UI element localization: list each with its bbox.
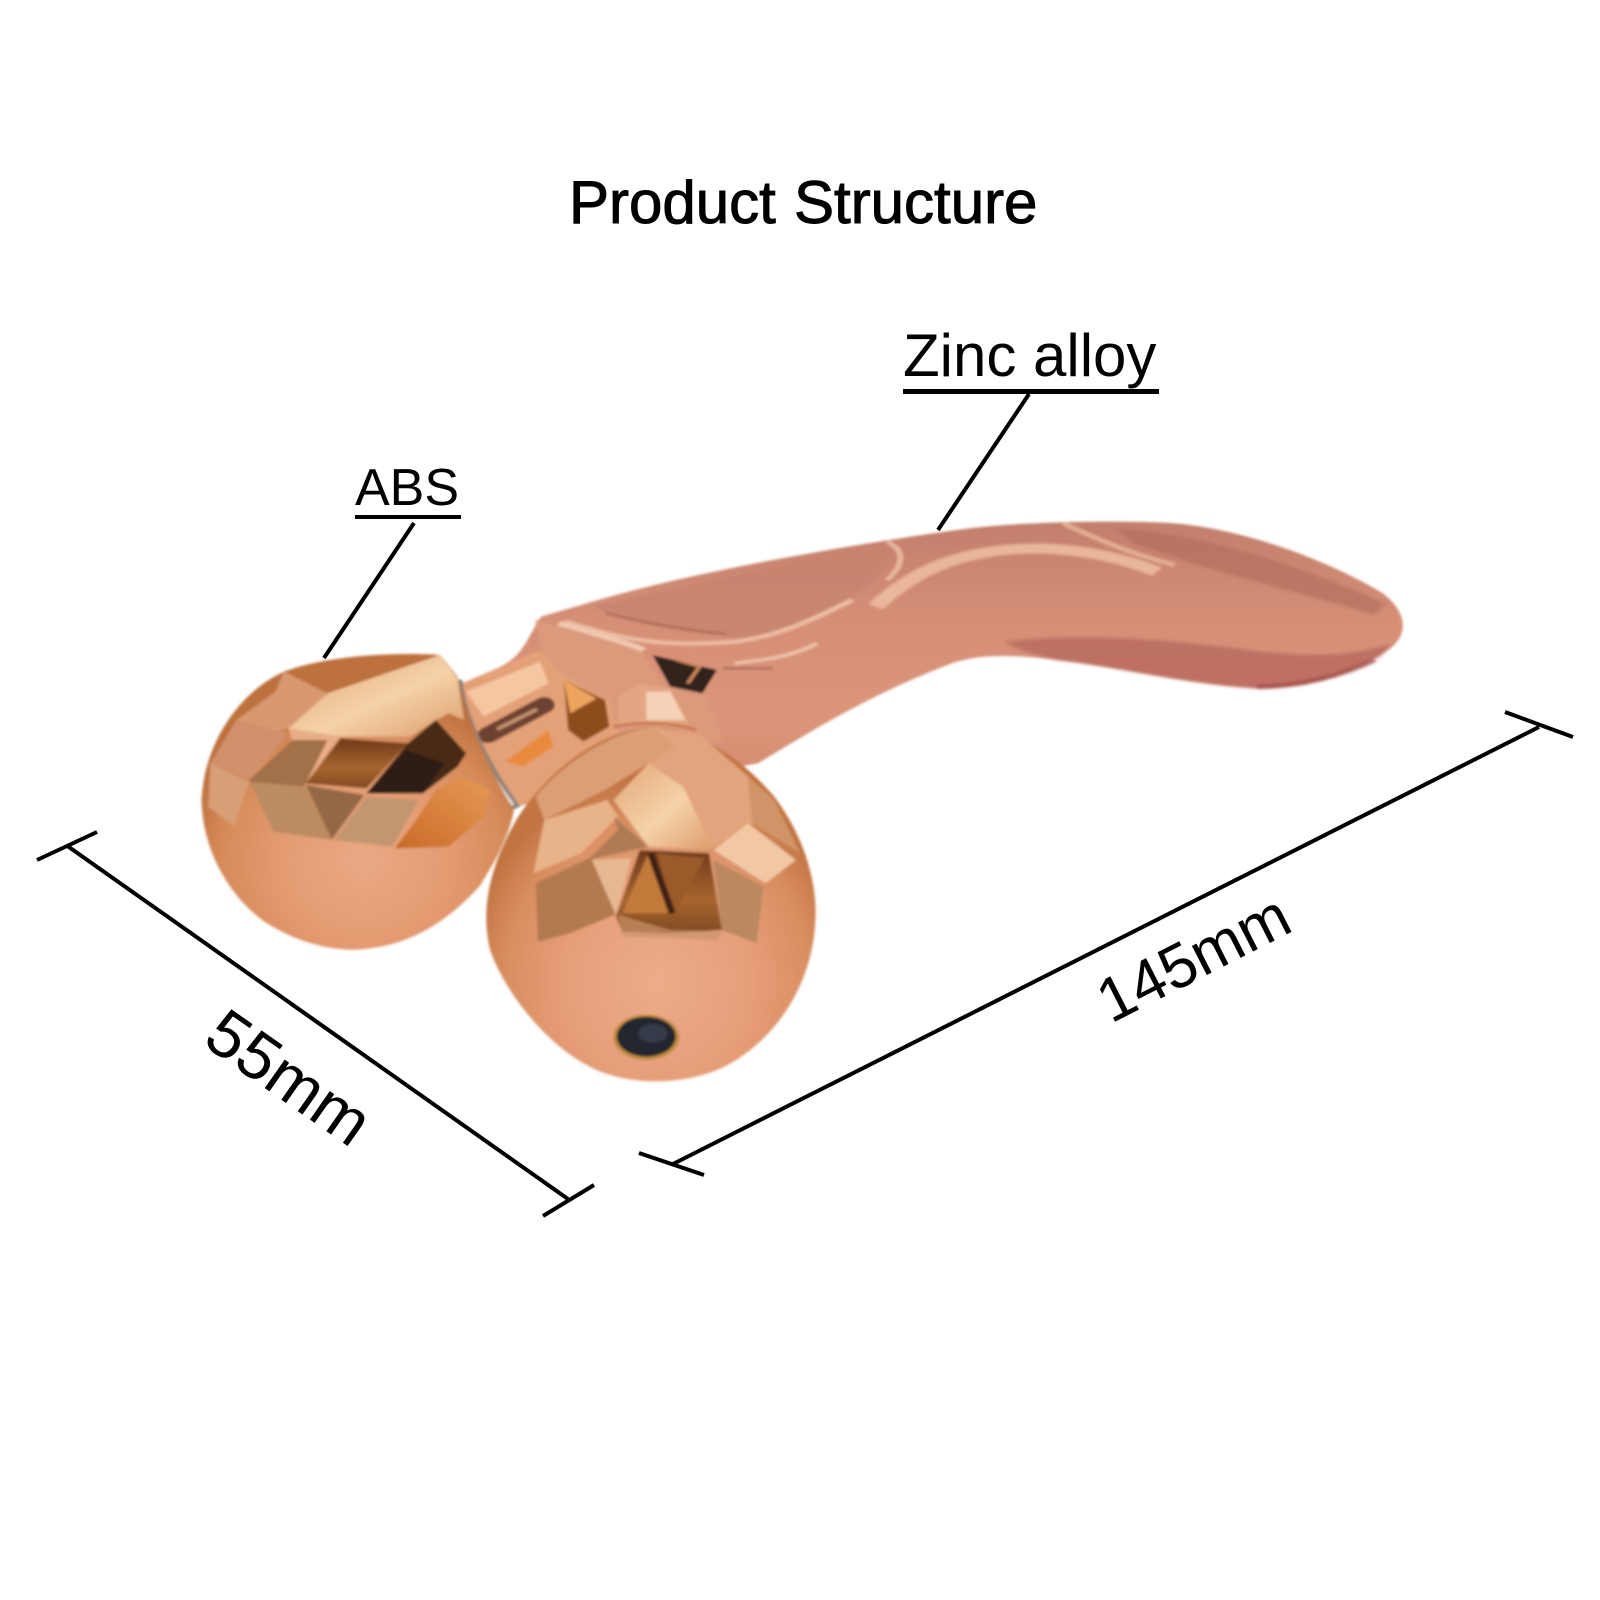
title: Structure — [794, 169, 1037, 236]
product: facial roller — [202, 522, 1403, 1081]
infrared button — [613, 1015, 679, 1060]
title — [569, 169, 1037, 236]
callout: Zinc alloy — [903, 322, 1159, 530]
callout: ABS: ABS — [355, 459, 459, 517]
dimension: 145mm — [639, 712, 1573, 1175]
right roller ball — [486, 727, 816, 1081]
callout: Zinc alloy: Zinc alloy — [903, 322, 1156, 389]
title: Product — [569, 169, 776, 236]
handle — [488, 522, 1403, 800]
dimension: 145mm: 145mm — [1086, 881, 1301, 1036]
neck and silver ring — [456, 650, 618, 808]
callout: ABS — [324, 459, 461, 658]
dimension: 55mm: 55mm — [193, 994, 386, 1160]
dimension: 55mm — [37, 832, 594, 1216]
left roller ball — [202, 654, 514, 950]
collar above right ball — [614, 683, 696, 730]
